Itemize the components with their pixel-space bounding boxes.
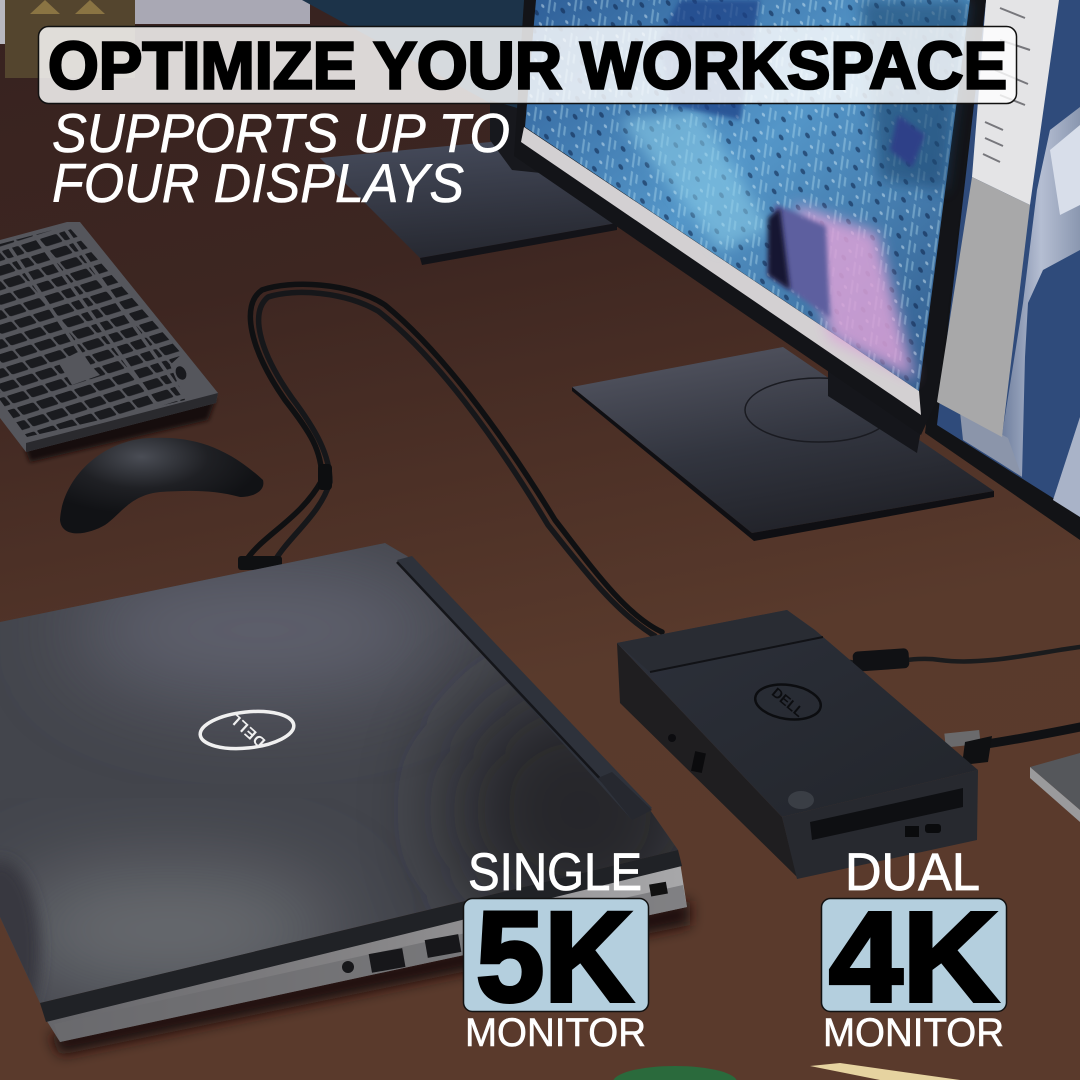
dock top face: [617, 610, 978, 817]
top dark band on screen: [660, 0, 760, 120]
dock power cable: [850, 647, 1080, 664]
subtitle: [52, 102, 510, 214]
dock vent: [810, 788, 963, 840]
laptop front dark band: [40, 850, 682, 1022]
monitor bottom white strip: [521, 127, 921, 415]
dock side ports: [691, 751, 706, 773]
cable clip: [318, 464, 332, 490]
back monitor base: [320, 140, 617, 258]
badge: single 5K monitor: SINGLE: [468, 843, 642, 902]
dock logo: [753, 681, 823, 723]
badge: single 5K monitor: 5K: [476, 886, 633, 1029]
main monitor: [514, 0, 994, 541]
monitor screen: [525, 0, 970, 391]
green item and pencil at the bottom: [613, 1063, 960, 1080]
sidebar checklist: [983, 8, 1030, 162]
wall and decorative box behind desk: [0, 0, 310, 78]
cables: [238, 284, 1080, 765]
dock front ports: [905, 826, 919, 837]
small chip: [890, 115, 925, 168]
docking station: [617, 610, 978, 879]
pink circuit area: [794, 204, 915, 380]
back monitor screen: [302, 0, 536, 110]
keyboard body: [0, 222, 218, 452]
dock left side: [617, 643, 797, 877]
silver tablet at right edge: [1030, 753, 1080, 822]
gray sidebar lower panel: [937, 177, 1030, 437]
laptop: [0, 543, 710, 1055]
laptop ports: [342, 882, 668, 973]
badge: dual 4K monitor: 4K: [829, 886, 998, 1029]
processor chip: [768, 204, 830, 318]
laptop shadow: [50, 900, 690, 1055]
subtitle: SUPPORTS UP TO: [52, 102, 510, 164]
title: OPTIMIZE YOUR WORKSPACE: [48, 28, 1007, 104]
badge: single 5K monitor: MONITOR: [465, 1011, 646, 1055]
white sidebar: [972, 0, 1059, 205]
laptop hinge strip: [397, 556, 652, 820]
badge: dual 4K monitor: DUAL: [845, 843, 980, 902]
monitor stand base: [572, 347, 994, 533]
keyboard column gaps: [8, 226, 185, 407]
dock power button: [788, 791, 814, 809]
dock front side: [782, 770, 978, 879]
back monitor neck: [490, 100, 560, 175]
badge: dual 4K monitor: MONITOR: [823, 1011, 1004, 1055]
dock logo: DELL: [769, 684, 807, 720]
badge: single 5K monitor: [464, 843, 648, 1055]
lid lighting: [0, 560, 710, 1040]
cyan circuit glow: [620, 110, 770, 250]
badge: dual 4K monitor: [822, 843, 1006, 1055]
dock top section: [617, 610, 823, 672]
numeric gap patch: [58, 352, 100, 385]
laptop logo: DELL: [226, 709, 269, 750]
keyboard: [0, 222, 218, 462]
right monitor: [925, 0, 1080, 540]
keyboard keys: [0, 226, 185, 437]
right monitor wallpaper: [937, 0, 1080, 515]
dark teal right side of screen: [860, 0, 970, 190]
subtitle: FOUR DISPLAYS: [52, 152, 464, 214]
long cable to dock: [245, 284, 662, 632]
right monitor bezel: [925, 0, 1080, 540]
monitor stand neck: [828, 370, 921, 453]
back monitor: [302, 0, 617, 265]
keyboard power indicator: [174, 365, 188, 381]
laptop logo: [198, 707, 296, 753]
laptop lid: [0, 543, 678, 1003]
monitor bezel: [514, 0, 986, 435]
connectors behind the laptop: [238, 556, 282, 570]
mouse: [60, 438, 263, 533]
keyboard shadow: [25, 398, 216, 462]
water glass image: [960, 107, 1080, 517]
dock usb cable: [980, 727, 1080, 745]
laptop silver edge: [45, 862, 687, 1042]
